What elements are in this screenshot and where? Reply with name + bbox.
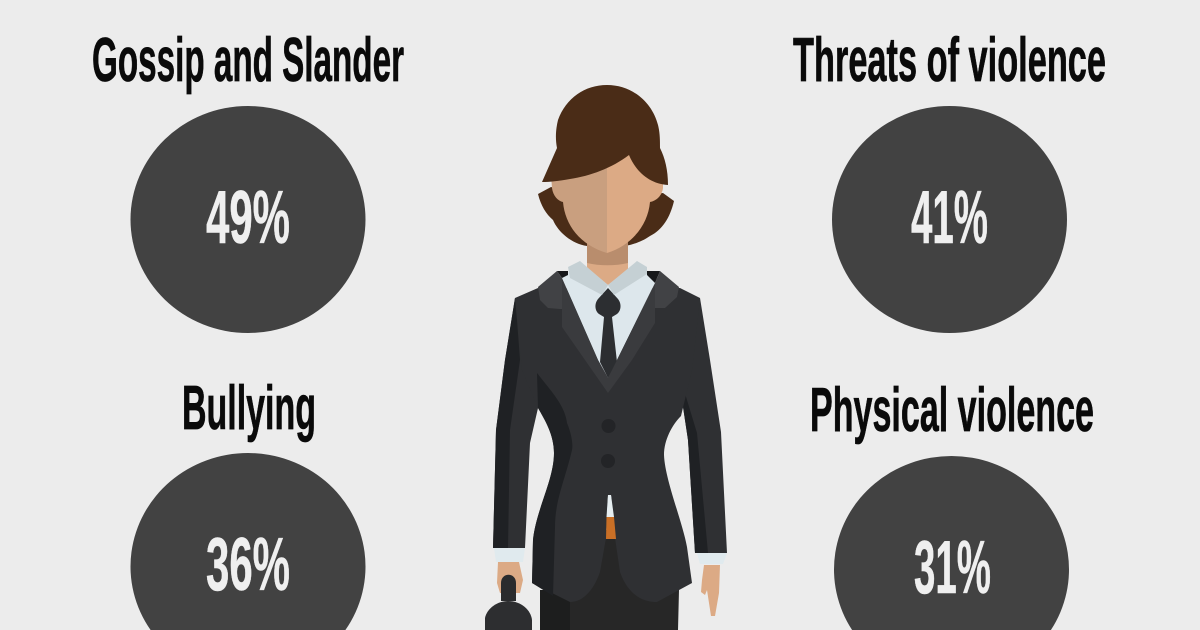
stat circle: 49%	[130, 106, 366, 333]
collar	[557, 261, 660, 295]
front hair	[542, 85, 668, 185]
stat circle: 31%	[834, 456, 1069, 630]
jacket torso	[515, 288, 700, 602]
stat circle: 36%	[130, 453, 366, 630]
briefcase	[485, 575, 532, 630]
left cuff	[494, 548, 525, 562]
right cuff	[697, 553, 727, 564]
left hand	[497, 562, 523, 593]
illustration: businesswoman in suit	[485, 85, 727, 630]
skirt	[540, 530, 679, 630]
back hair	[538, 187, 674, 246]
heading: Bullying: Bullying	[182, 374, 316, 443]
belt and shirt gap	[606, 495, 616, 539]
face	[551, 140, 663, 253]
heading: Gossip and Slander: Gossip and Slander	[92, 26, 404, 95]
stat circle: 36%: 36%	[206, 522, 290, 606]
left lapel	[538, 271, 608, 393]
stat circle: 49%: 49%	[206, 175, 290, 259]
stat circle: 41%: 41%	[911, 175, 988, 259]
neck	[587, 240, 628, 285]
stat circle: 41%	[832, 106, 1067, 333]
shirt	[562, 262, 655, 378]
right sleeve	[670, 298, 727, 553]
jacket buttons	[601, 419, 616, 468]
right lapel	[608, 271, 679, 393]
stat circle: 31%: 31%	[914, 525, 991, 609]
right hand	[701, 565, 720, 616]
left sleeve	[493, 298, 545, 548]
tie	[595, 288, 621, 378]
